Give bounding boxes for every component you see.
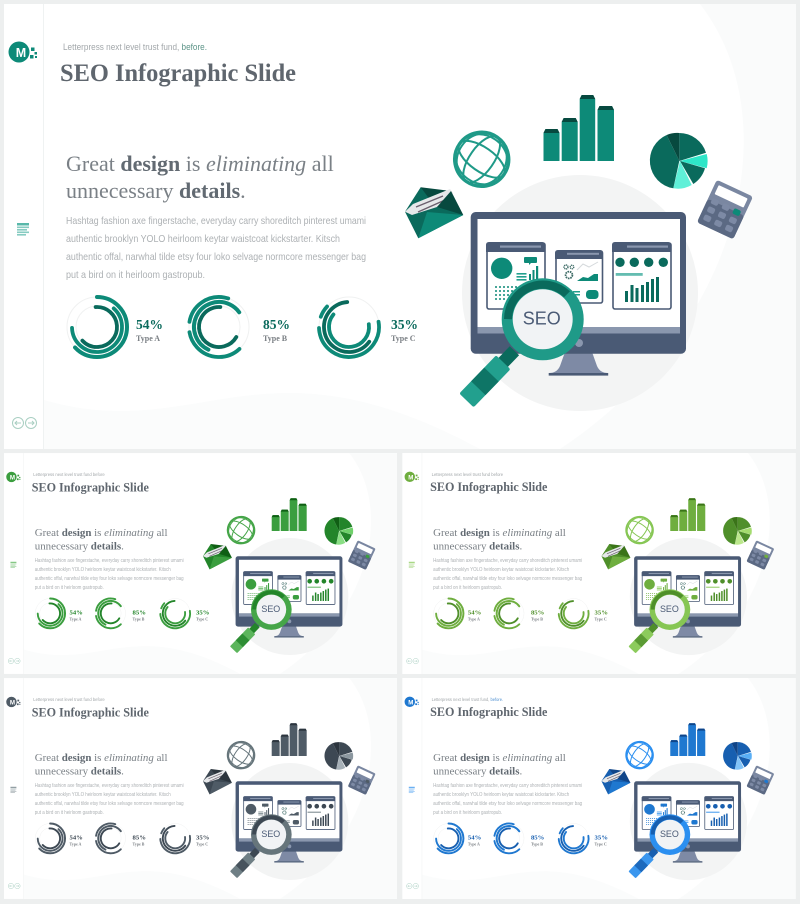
ring chart: Type B: [488, 592, 530, 634]
body text: authentic brooklyn YOLO heirloom keytar waistcoat kickstarter. Kitsch: [433, 567, 569, 573]
body text: authentic brooklyn YOLO heirloom keytar waistcoat kickstarter. Kitsch: [66, 234, 340, 245]
label: 85% Type B: Type B: [531, 616, 543, 621]
label: 35% Type C: Type C: [196, 616, 208, 621]
label: 85% Type B: 85%: [133, 834, 146, 841]
icon: navigation arrows: [12, 418, 36, 428]
headline: unnecessary: [433, 540, 489, 552]
label: 35% Type C: 35%: [595, 609, 608, 616]
magnifier: [628, 814, 690, 878]
panel: blue slide: [402, 678, 796, 899]
icon: sidebar menu: [409, 562, 415, 568]
label: 35% Type C: [391, 317, 418, 343]
label: 35% Type C: Type C: [391, 334, 416, 343]
label: 85% Type B: [133, 609, 146, 621]
logo: [405, 697, 419, 707]
ring chart: Type A: [62, 292, 132, 362]
icon: globe: [621, 736, 658, 774]
headline: Great design is eliminating all: [35, 527, 167, 539]
body text: authentic offal, narwhal tilde etsy four loko selvage normcore messenger bag: [433, 576, 582, 582]
magnifier label: SEO: SEO: [261, 604, 280, 614]
magnifier label: SEO: SEO: [660, 829, 679, 839]
headline: unnecessary: [433, 765, 489, 777]
label: 54% Type A: 54%: [136, 317, 163, 332]
headline: unnecessary: [35, 540, 91, 552]
panel: dashboard one: [486, 242, 545, 309]
body text: authentic offal, narwhal tilde etsy four loko selvage normcore messenger bag: [35, 576, 184, 582]
label: 54% Type A: 54%: [468, 834, 482, 841]
icon: calculator: [348, 765, 376, 795]
panel: dashboard three: [612, 242, 671, 309]
body text: authentic offal, narwhal tilde etsy four loko selvage normcore messenger bag: [35, 801, 184, 807]
label: 35% Type C: 35%: [595, 834, 608, 841]
panel: dashboard two: [555, 250, 603, 303]
label: 35% Type C: 35%: [196, 834, 210, 841]
label: 54% Type A: [468, 609, 482, 621]
panel: slate slide: [4, 678, 397, 899]
body text: [66, 216, 366, 281]
label: 54% Type A: Type A: [136, 334, 160, 343]
monitor: [236, 556, 342, 637]
headline: details.: [489, 540, 522, 552]
icon: calculator: [348, 540, 376, 570]
icon: bar chart: [272, 498, 307, 531]
label: 54% Type A: Type A: [468, 841, 480, 846]
monitor: [634, 556, 741, 638]
ring chart: Type C: [311, 289, 387, 365]
title: SEO Infographic Slide: [32, 480, 149, 494]
title: SEO Infographic Slide: [430, 705, 548, 719]
label: 85% Type B: Type B: [531, 841, 543, 846]
headline: Great design is eliminating all: [66, 151, 334, 176]
headline: details.: [179, 178, 246, 203]
body text: Hashtag fashion axe fingerstache, everyday carry shoreditch pinterest umami: [66, 216, 366, 227]
icon: navigation arrows: [8, 658, 20, 664]
body text: Hashtag fashion axe fingerstache, everyday carry shoreditch pinterest umami: [433, 558, 582, 564]
icon: bar chart: [670, 723, 705, 756]
panel: dashboard two: [277, 800, 301, 826]
icon: pie chart: [324, 742, 353, 770]
ring chart: Type A: [431, 821, 466, 856]
body text: put a bird on it heirloom gastropub.: [433, 585, 502, 591]
icon: bar chart: [670, 498, 705, 531]
panel: light green slide: [402, 453, 796, 674]
label: 85% Type B: 85%: [531, 609, 545, 616]
label: 85% Type B: [263, 317, 290, 343]
subtitle: Letterpress next level trust fund, before.: [63, 42, 207, 52]
icon: pie chart: [324, 517, 353, 545]
body text: [433, 558, 582, 591]
body text: authentic brooklyn YOLO heirloom keytar waistcoat kickstarter. Kitsch: [35, 567, 171, 573]
label: 54% Type A: 54%: [468, 609, 482, 616]
body text: put a bird on it heirloom gastropub.: [35, 810, 104, 816]
panel: dashboard two: [277, 575, 301, 601]
label: 85% Type B: 85%: [263, 317, 290, 332]
icon: envelope: [203, 544, 232, 569]
ring chart: Type A: [33, 821, 68, 856]
headline: details.: [91, 765, 124, 777]
icon: globe: [222, 511, 260, 549]
label: 85% Type B: [531, 609, 545, 621]
title: SEO Infographic Slide: [430, 480, 548, 494]
body text: put a bird on it heirloom gastropub.: [35, 585, 104, 591]
monitor: [236, 781, 342, 862]
ring chart: Type B: [90, 817, 132, 859]
label: 85% Type B: Type B: [133, 616, 145, 621]
icon: sidebar menu: [17, 223, 29, 236]
body text: Hashtag fashion axe fingerstache, everyday carry shoreditch pinterest umami: [35, 783, 184, 789]
panel: dashboard one: [642, 571, 671, 604]
subtitle: Letterpress next level trust fund before: [33, 697, 105, 702]
headline: details.: [91, 540, 124, 552]
body text: authentic brooklyn YOLO heirloom keytar waistcoat kickstarter. Kitsch: [35, 792, 171, 798]
backdrop circle: [462, 175, 698, 411]
icon: bar chart: [272, 723, 307, 756]
icon: pie chart: [723, 517, 752, 545]
label: 54% Type A: [468, 834, 482, 846]
ring chart: Type C: [555, 819, 593, 858]
magnifier label: SEO: SEO: [660, 604, 679, 614]
panel: dashboard three: [306, 571, 335, 604]
ring chart: Type C: [156, 594, 194, 632]
title: SEO Infographic Slide: [60, 58, 296, 87]
subtitle: Letterpress next level trust fund before: [33, 472, 105, 477]
panel: dashboard three: [704, 796, 734, 829]
label: 35% Type C: [595, 834, 608, 846]
magnifier label: SEO: SEO: [523, 308, 561, 328]
body text: [433, 783, 582, 816]
label: 54% Type A: 54%: [70, 609, 83, 616]
label: 35% Type C: 35%: [391, 317, 418, 332]
label: 35% Type C: [196, 834, 210, 846]
subtitle: Letterpress next level trust fund before: [432, 472, 504, 477]
icon: calculator: [697, 180, 753, 239]
panel: dashboard two: [676, 800, 700, 826]
panel: dashboard two: [676, 575, 700, 601]
backdrop circle: [231, 763, 348, 880]
icon: globe: [444, 122, 519, 197]
icon: pie chart: [723, 742, 752, 770]
body text: Hashtag fashion axe fingerstache, everyday carry shoreditch pinterest umami: [433, 783, 582, 789]
icon: sidebar menu: [10, 787, 16, 793]
body text: authentic offal, narwhal tilde etsy four loko selvage normcore messenger bag: [66, 252, 366, 263]
logo: [6, 697, 20, 707]
icon: envelope: [601, 769, 630, 794]
monitor: [634, 781, 741, 863]
label: 35% Type C: Type C: [196, 841, 208, 846]
headline: details.: [489, 765, 522, 777]
icon: calculator: [746, 540, 774, 570]
body text: put a bird on it heirloom gastropub.: [433, 810, 502, 816]
icon: navigation arrows: [407, 883, 418, 889]
panel: dashboard one: [243, 796, 272, 829]
label: 54% Type A: Type A: [468, 616, 480, 621]
panel: dashboard one: [243, 571, 272, 604]
magnifier: [628, 589, 690, 653]
label: 35% Type C: [595, 609, 608, 621]
logo: [6, 472, 20, 482]
backdrop circle: [630, 538, 747, 655]
backdrop circle: [630, 763, 747, 880]
logo: [405, 472, 419, 482]
label: 85% Type B: 85%: [531, 834, 545, 841]
icon: calculator: [746, 765, 774, 795]
label: 35% Type C: 35%: [196, 609, 210, 616]
icon: globe: [621, 511, 658, 549]
title: SEO Infographic Slide: [32, 705, 149, 719]
headline: Great design is eliminating all: [433, 752, 566, 764]
panel: green slide: [4, 453, 397, 674]
panel: dashboard one: [642, 796, 671, 829]
panel: dashboard three: [306, 796, 335, 829]
icon: bar chart: [544, 95, 614, 161]
headline: Great design is eliminating all: [35, 752, 167, 764]
label: 35% Type C: Type C: [595, 616, 607, 621]
icon: envelope: [203, 769, 232, 794]
body text: put a bird on it heirloom gastropub.: [66, 270, 205, 281]
magnifier: [459, 278, 584, 407]
label: 54% Type A: 54%: [70, 834, 83, 841]
icon: envelope: [405, 187, 463, 238]
headline: unnecessary: [66, 178, 179, 203]
headline: Great design is eliminating all: [433, 527, 566, 539]
ring chart: Type B: [177, 285, 261, 369]
ring chart: Type B: [90, 592, 132, 634]
logo: M: [16, 46, 26, 60]
subtitle: Letterpress next level trust fund, before.: [432, 697, 503, 702]
label: 35% Type C: [196, 609, 210, 621]
body text: authentic brooklyn YOLO heirloom keytar waistcoat kickstarter. Kitsch: [433, 792, 569, 798]
label: 54% Type A: [70, 834, 83, 846]
label: 85% Type B: [133, 834, 146, 846]
label: 85% Type B: 85%: [133, 609, 146, 616]
ring chart: Type A: [33, 596, 68, 631]
magnifier: [230, 589, 292, 653]
monitor: [471, 212, 686, 376]
ring chart: Type C: [555, 594, 593, 633]
label: 54% Type A: [136, 317, 163, 343]
magnifier label: SEO: SEO: [261, 829, 280, 839]
magnifier: [230, 814, 292, 878]
body text: Hashtag fashion axe fingerstache, everyday carry shoreditch pinterest umami: [35, 558, 184, 564]
label: 35% Type C: Type C: [595, 841, 607, 846]
icon: navigation arrows: [8, 883, 20, 889]
body text: authentic offal, narwhal tilde etsy four loko selvage normcore messenger bag: [433, 801, 582, 807]
label: 54% Type A: [70, 609, 83, 621]
ring chart: Type B: [488, 817, 530, 859]
panel: main teal slide: [4, 4, 796, 449]
label: 85% Type B: Type B: [263, 334, 288, 343]
ring chart: Type C: [156, 819, 194, 857]
icon: sidebar menu: [10, 562, 16, 568]
label: 85% Type B: Type B: [133, 841, 145, 846]
label: 85% Type B: [531, 834, 545, 846]
body text: [35, 558, 184, 591]
logo: [8, 42, 37, 62]
label: 54% Type A: Type A: [70, 616, 82, 621]
panel: dashboard three: [704, 571, 734, 604]
icon: navigation arrows: [407, 658, 418, 664]
icon: globe: [222, 736, 260, 774]
headline: unnecessary: [35, 765, 91, 777]
backdrop circle: [231, 538, 348, 655]
body text: [35, 783, 184, 816]
label: 54% Type A: Type A: [70, 841, 82, 846]
ring chart: Type A: [431, 596, 466, 631]
icon: pie chart: [650, 133, 708, 189]
icon: sidebar menu: [409, 787, 415, 793]
icon: envelope: [601, 544, 630, 569]
